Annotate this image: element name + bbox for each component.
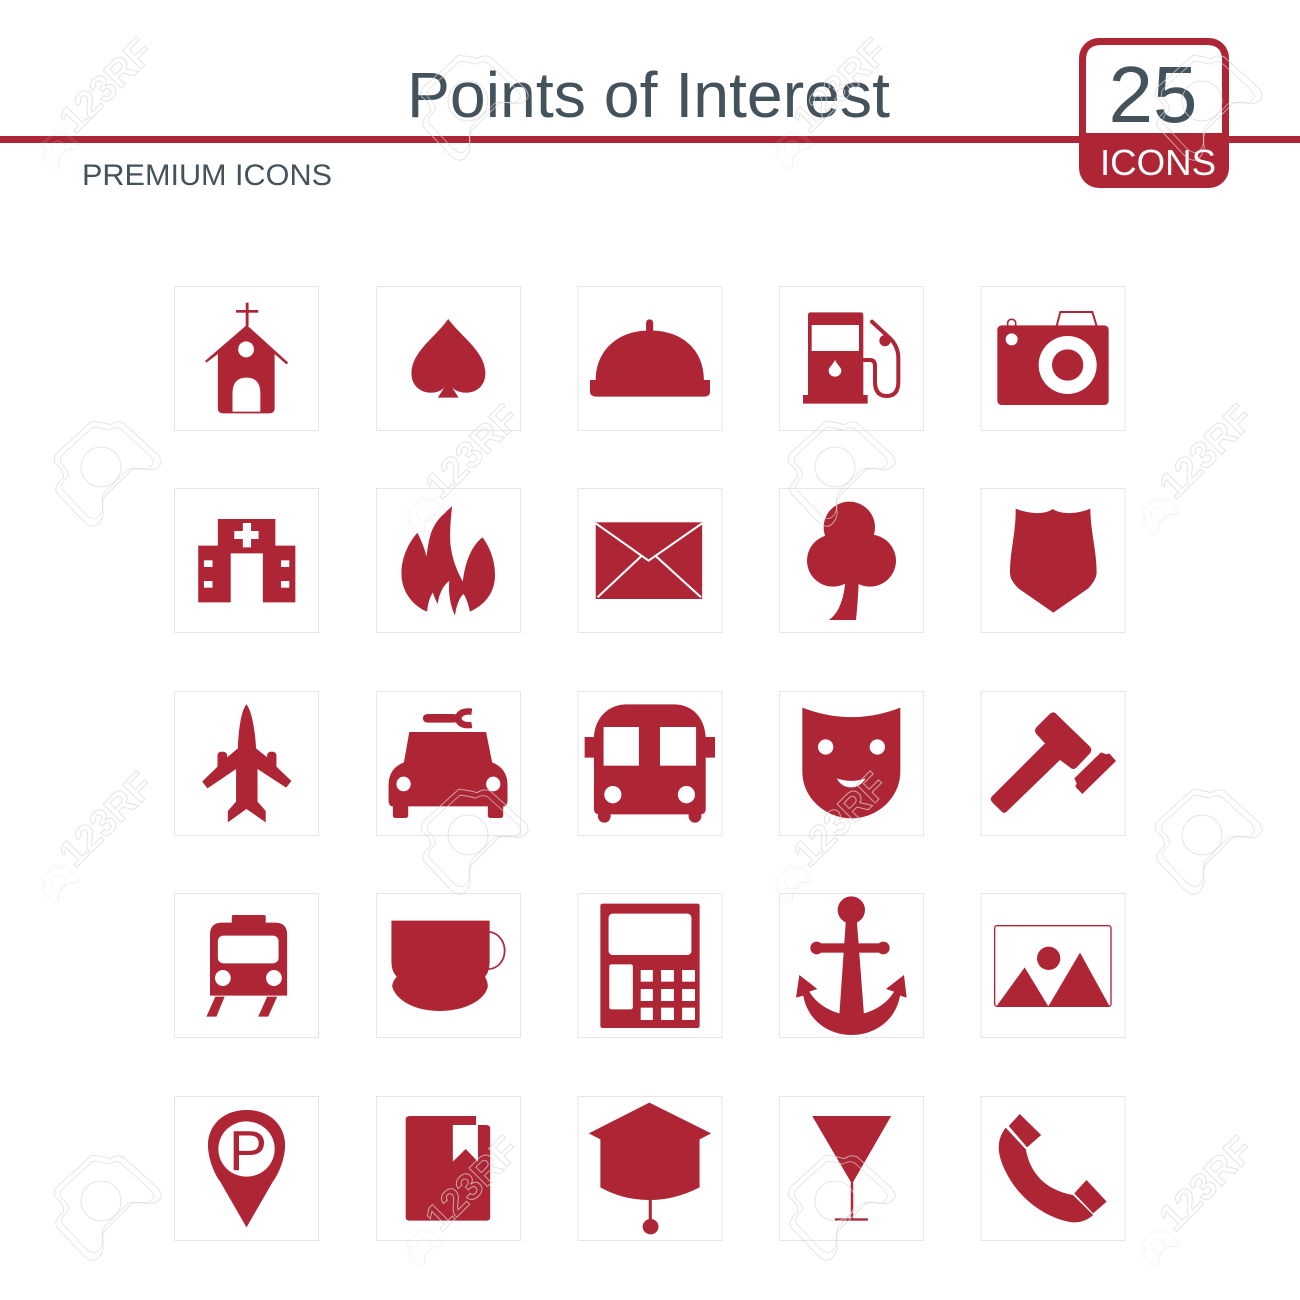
icon: bus	[578, 692, 722, 836]
icon: parking pin: P	[229, 1119, 267, 1183]
icon: airplane	[174, 692, 318, 836]
icon: cocktail glass	[780, 1096, 924, 1240]
icon: tree	[780, 488, 924, 632]
watermarks: 123RF	[1152, 1129, 1262, 1239]
icon: cup	[376, 894, 520, 1038]
badge: 25 icons: ICONS	[1100, 142, 1216, 183]
icon: train	[174, 894, 318, 1038]
icon: book	[376, 1096, 520, 1240]
icon: camera	[981, 286, 1125, 430]
watermarks: 123RF	[418, 397, 528, 507]
icon: picture	[981, 894, 1125, 1038]
icon: parking pin	[174, 1096, 318, 1240]
watermarks: 123RF	[786, 765, 896, 875]
icon: church	[174, 286, 318, 430]
badge: 25 icons: 25	[1109, 50, 1197, 139]
icon: car with wrench	[376, 692, 520, 836]
icon: anchor	[780, 894, 924, 1038]
icon: calculator	[578, 894, 722, 1038]
badge: 25 icons	[1079, 38, 1229, 188]
icon: shield	[981, 488, 1125, 632]
watermarks: 123RF	[52, 765, 162, 875]
icon: spade	[376, 286, 520, 430]
watermarks: 123RF	[1152, 397, 1262, 507]
icon: envelope	[578, 488, 722, 632]
icon: gas pump	[780, 286, 924, 430]
subtitle: PREMIUM ICONS	[82, 159, 332, 192]
icon: phone	[981, 1096, 1125, 1240]
icon: graduation cap	[578, 1096, 722, 1240]
title: Points of Interest	[407, 59, 890, 131]
watermarks: 123RF	[418, 1129, 528, 1239]
watermarks: 123RF	[52, 31, 162, 141]
icon: cloche	[578, 286, 722, 430]
icon: theatre mask	[780, 692, 924, 836]
icon: fire	[376, 488, 520, 632]
icon: hospital	[174, 488, 318, 632]
watermarks: 123RF	[786, 31, 896, 141]
icon: gavel	[981, 692, 1125, 836]
